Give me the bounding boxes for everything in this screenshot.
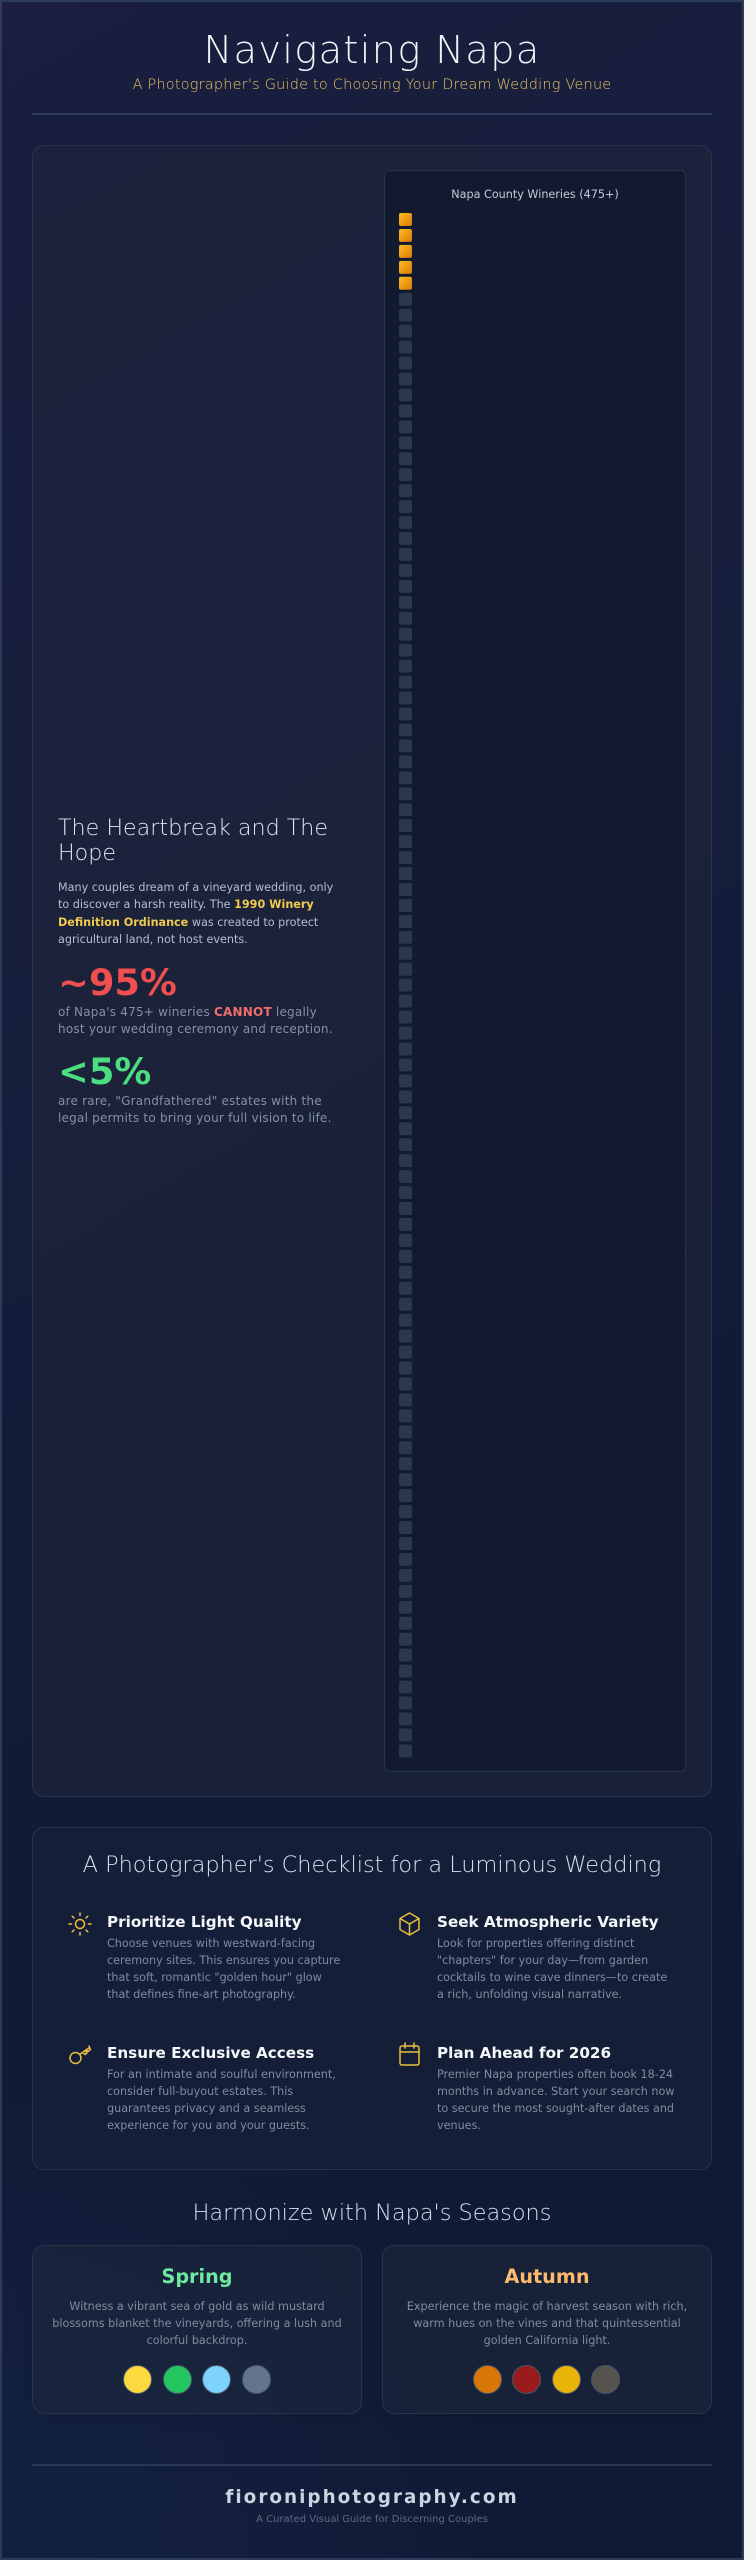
item text (107, 1936, 340, 2001)
subtitle: A Photographer's Guide to Choosing Your Dream Wedding Venue (133, 77, 611, 93)
item text: months in advance. Start your search now (437, 2085, 675, 2098)
item text (437, 1936, 667, 2001)
autumn palette (473, 2365, 620, 2394)
stat: 95 percent: ~95% (58, 961, 177, 1004)
item text: consider full-buyout estates. This (107, 2085, 293, 2098)
spring palette (123, 2365, 271, 2394)
panel: autumn (382, 2245, 712, 2414)
item text (107, 2068, 336, 2132)
icon: key (69, 2045, 92, 2064)
heading: the heartbreak and the hope: The Heartbreak and The (58, 815, 328, 841)
item title: Ensure Exclusive Access (107, 2044, 314, 2062)
item text: guarantees privacy and a seamless (107, 2102, 306, 2115)
item text: a rich, unfolding visual narrative. (437, 1988, 622, 2001)
footer brand: fioroniphotography.com (225, 2486, 519, 2508)
panel: the heartbreak and the hope (32, 145, 712, 1797)
intro text (58, 881, 333, 946)
heading: the heartbreak and the hope (58, 815, 328, 866)
unit chart: one square column (399, 213, 412, 1758)
item text: that defines fine-art photography. (107, 1988, 296, 2001)
spring text: colorful backdrop. (147, 2334, 247, 2347)
stat: 5 percent: <5% (58, 1050, 151, 1093)
checklist item: plan ahead (399, 2042, 675, 2132)
autumn text: warm hues on the vines and that quintessential (413, 2317, 681, 2330)
intro text: agricultural land, not host events. (58, 933, 248, 946)
item text: cocktails to wine cave dinners—to create (437, 1971, 667, 1984)
stat description: cannot host: host your wedding ceremony and reception. (58, 1022, 333, 1036)
autumn title: Autumn (504, 2265, 590, 2288)
stat description: grandfathered: legal permits to bring your full vision to life. (58, 1111, 332, 1125)
item text: Look for properties offering distinct (437, 1936, 634, 1950)
panel: checklist (32, 1827, 712, 2170)
intro text: to discover a harsh reality. The 1990 Winery (58, 898, 314, 911)
title: Navigating Napa (203, 28, 541, 72)
item text: that soft, romantic "golden hour" glow (107, 1971, 322, 1984)
chart title: Napa County Wineries (475+) (451, 188, 619, 201)
intro text: Many couples dream of a vineyard wedding, only (58, 881, 333, 894)
stat description: grandfathered: are rare, "Grandfathered" estates with the (58, 1094, 322, 1108)
autumn text (407, 2300, 687, 2347)
item text: to secure the most sought-after dates and (437, 2102, 674, 2115)
item text: "chapters" for your day—from garden (437, 1954, 648, 1967)
item text: venues. (437, 2119, 481, 2132)
item text (437, 2068, 675, 2132)
item title: Seek Atmospheric Variety (437, 1913, 659, 1931)
seasons heading: Harmonize with Napa's Seasons (193, 2200, 551, 2226)
checklist item: light quality (68, 1912, 340, 2001)
spring text (52, 2300, 342, 2347)
item text: ceremony sites. This ensures you capture (107, 1954, 340, 1967)
icon: sun (68, 1912, 92, 1936)
muted squares: 95 percent (399, 293, 412, 1757)
autumn text: Experience the magic of harvest season with rich, (407, 2300, 687, 2312)
checklist heading: A Photographer's Checklist for a Luminous Wedding (83, 1852, 661, 1878)
item text: For an intimate and soulful environment, (107, 2068, 336, 2080)
stat description: cannot host: of Napa's 475+ wineries CANNOT legally (58, 1005, 317, 1019)
intro text: Definition Ordinance was created to protect (58, 916, 318, 929)
footer divider (32, 2464, 712, 2466)
header divider (32, 113, 712, 115)
spring title: Spring (162, 2265, 232, 2288)
checklist item: atmospheric variety (399, 1912, 667, 2001)
item text: Premier Napa properties often book 18-24 (437, 2068, 673, 2080)
stat description: grandfathered (58, 1094, 332, 1125)
item title: Prioritize Light Quality (107, 1913, 302, 1931)
checklist item: exclusive access (69, 2044, 336, 2132)
item title: Plan Ahead for 2026 (437, 2044, 611, 2062)
panel: winery chart (384, 170, 686, 1772)
heading: the heartbreak and the hope: Hope (58, 840, 116, 866)
icon: calendar (399, 2042, 420, 2066)
autumn text: golden California light. (484, 2334, 610, 2347)
spring text: Witness a vibrant sea of gold as wild mustard (69, 2300, 325, 2312)
item text: experience for you and your guests. (107, 2119, 310, 2132)
spring text: blossoms blanket the vineyards, offering a lush and (52, 2317, 342, 2330)
stat description: cannot host (58, 1005, 333, 1036)
highlighted squares: 5 percent (399, 213, 412, 290)
footer tagline: A Curated Visual Guide for Discerning Couples (256, 2514, 488, 2525)
panel: spring (32, 2245, 362, 2414)
item text: Choose venues with westward-facing (107, 1936, 315, 1950)
icon: box (399, 1912, 420, 1936)
